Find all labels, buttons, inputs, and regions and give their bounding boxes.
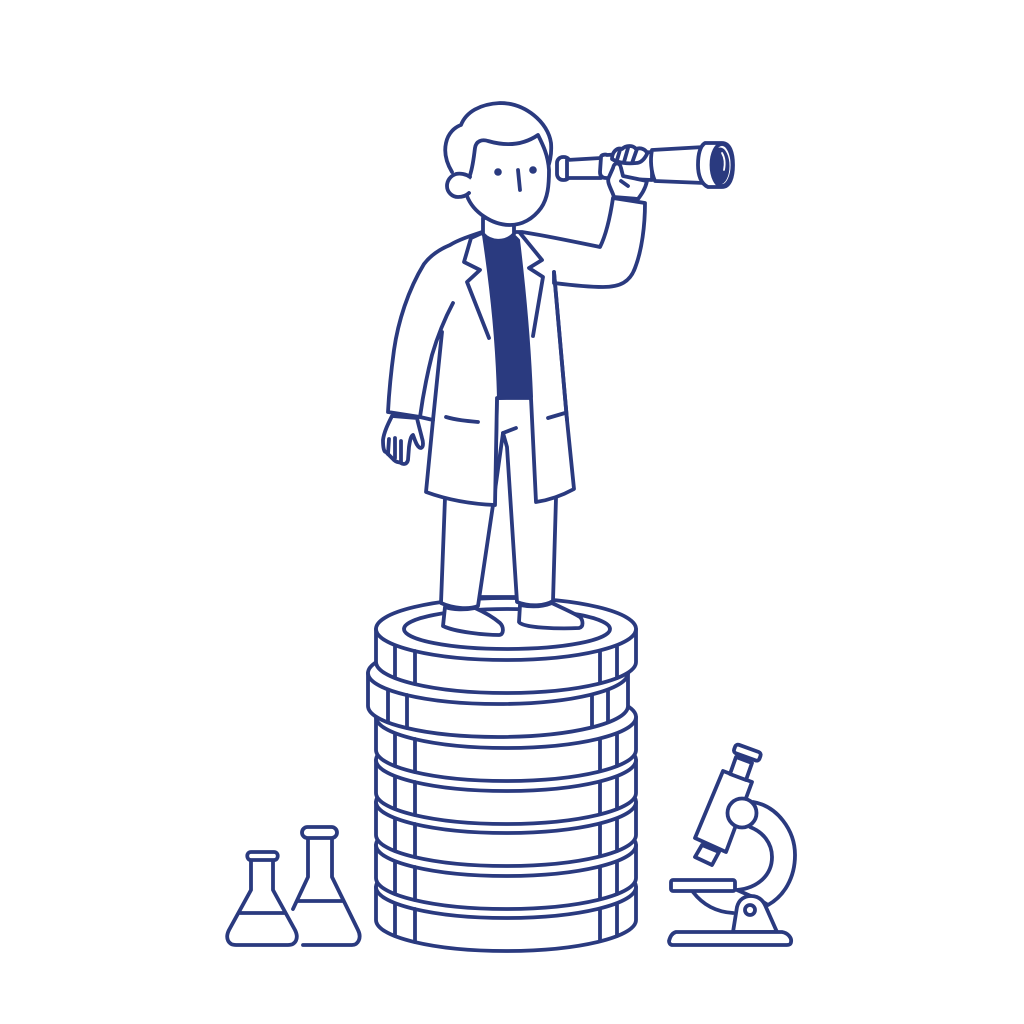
coat sleeve inner line bbox=[420, 303, 453, 420]
left lapel bbox=[464, 233, 489, 338]
narrow tube bbox=[567, 158, 601, 178]
neck bbox=[483, 218, 514, 241]
hair bbox=[445, 103, 551, 172]
lens bbox=[712, 148, 728, 184]
eyepiece bbox=[557, 157, 570, 180]
objective nosepiece bbox=[695, 845, 719, 865]
coin 1 (top) bbox=[376, 598, 636, 693]
lens housing bbox=[698, 143, 733, 187]
ear bbox=[447, 174, 470, 197]
trousers bbox=[441, 395, 556, 608]
microscope arm bbox=[737, 802, 795, 905]
holding hand bbox=[608, 164, 647, 199]
spyglass bbox=[557, 143, 733, 199]
coin 6 bbox=[376, 814, 636, 909]
eyepiece cap bbox=[733, 744, 762, 761]
flask liquid line bbox=[240, 911, 285, 915]
coin 3 bbox=[376, 686, 636, 781]
coin 2 (offset) bbox=[368, 642, 628, 737]
left shoe bbox=[443, 607, 503, 635]
body tube bbox=[695, 771, 752, 852]
flask body bbox=[227, 860, 297, 945]
icon: flask left bbox=[227, 852, 297, 945]
middle tube bbox=[600, 152, 652, 180]
eyes bbox=[494, 168, 502, 176]
wide tube bbox=[651, 147, 704, 183]
flask lip bbox=[302, 827, 337, 838]
pillar bbox=[733, 896, 777, 932]
lab coat body bbox=[388, 198, 645, 505]
coin 5 bbox=[376, 771, 636, 866]
dark shirt bbox=[483, 235, 532, 399]
fingers bbox=[612, 146, 647, 163]
lower arc bbox=[693, 892, 733, 913]
stage bbox=[671, 880, 735, 891]
coat right edge bbox=[554, 272, 567, 420]
nose bbox=[518, 170, 520, 190]
scientist bbox=[383, 103, 733, 635]
base bbox=[669, 932, 791, 945]
icon: flask right bbox=[293, 827, 360, 945]
flask lip bbox=[247, 852, 278, 860]
coin stack bbox=[368, 598, 636, 951]
flask body bbox=[293, 838, 360, 945]
left hand bbox=[383, 416, 423, 464]
coin 4 bbox=[376, 729, 636, 824]
face bbox=[467, 135, 549, 225]
icon: microscope bbox=[669, 744, 795, 945]
coin 7 (bottom) bbox=[376, 856, 636, 951]
right shoe bbox=[519, 603, 582, 628]
coat pockets bbox=[446, 413, 565, 422]
eyepiece neck bbox=[730, 757, 752, 780]
right lapel bbox=[520, 233, 543, 336]
flask liquid line bbox=[298, 899, 342, 903]
focus knob bbox=[728, 798, 756, 828]
head bbox=[445, 103, 551, 225]
